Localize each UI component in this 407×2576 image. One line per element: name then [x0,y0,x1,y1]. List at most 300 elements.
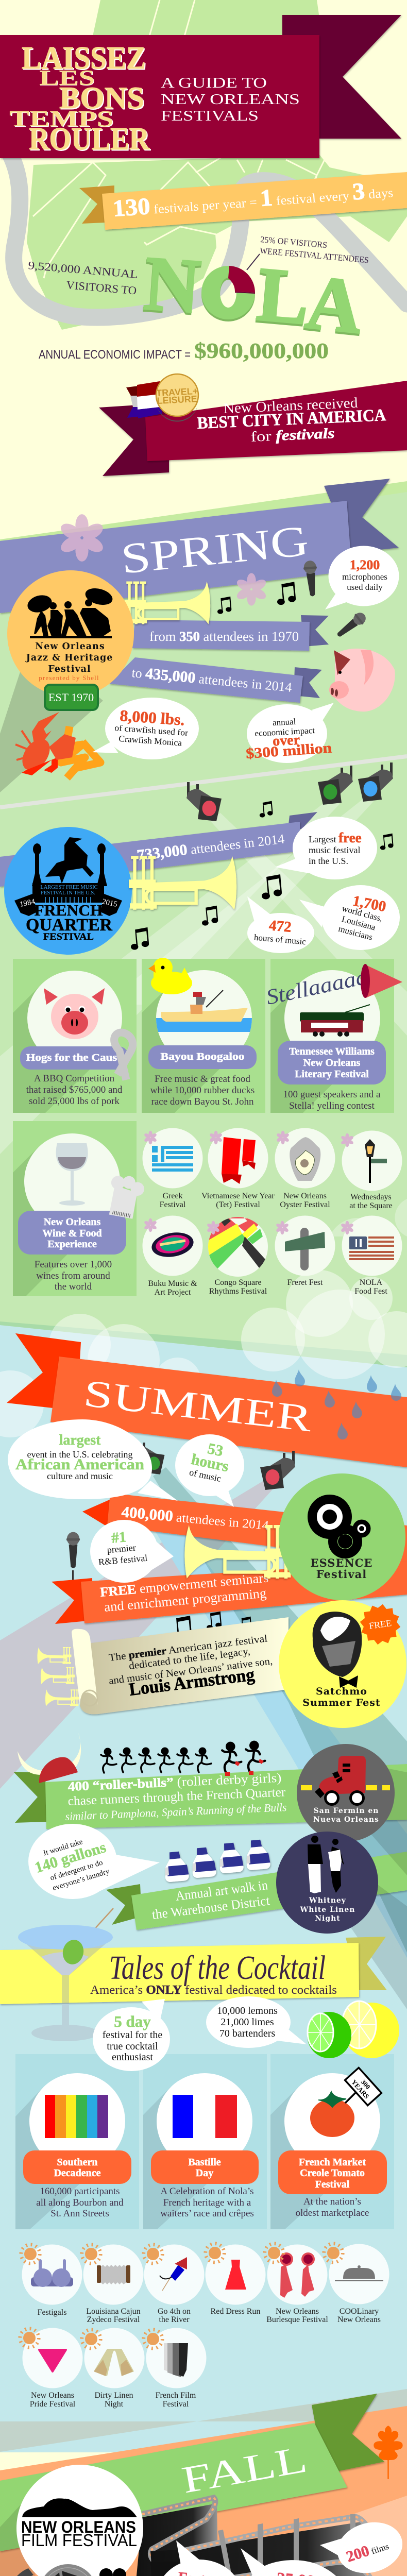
heading: Tales of the Cocktail: Tales of the Cocktail [109,1949,326,1987]
festival: Greek Festival: Greek [162,1192,183,1200]
festival: Congo Square [206,1216,268,1296]
icon: streetcar [300,1005,370,1037]
Whitney White Linen Night badge: Whitney [309,1896,346,1905]
bubble: 472 hours [247,896,314,953]
annual economic impact [39,340,329,363]
bubble: largest free music festival [275,817,377,879]
panel: Wine and Food Experience: the world [55,1281,92,1292]
bubble: 200 films: 200 films [344,2536,391,2566]
bubble: largest event: African American [15,1456,144,1473]
bubble: 5 day festival: true cocktail [107,2041,158,2052]
panel: Hogs for the Cause [13,959,137,1113]
icon: movie camera [99,2568,129,2576]
icon: Travel + Leisure medal: LEISURE [157,394,197,406]
panel: Bastille Day: A Celebration of Nola’s [161,2186,253,2197]
bubble: economic impact over $300 million: annual [273,717,296,727]
stage light beams: summer [0,1467,407,1958]
ribbon: 400,000 attendees [82,1493,407,1564]
French Quarter Festival badge: 2015 [101,897,118,909]
title: Laissez les bons temps rouler: ROULER [29,122,150,157]
bubble: 8,000 lbs of crawfish: Crawfish Monica [118,734,182,748]
icon: notes [172,1612,252,1640]
camera light beam [127,2496,407,2576]
icon: trumpet spring [125,581,210,624]
bubble: 472 hours: 472 [268,917,292,936]
icon: spotlights [134,1441,295,1490]
festival: Dirty Linen: Dirty Linen [94,2391,133,2400]
icon: Louis Armstrong portrait [313,1612,362,1688]
panel: Wine and Food Experience [13,1121,147,1296]
icon: flower [58,514,106,562]
title: Laissez les bons temps rouler: LAISSEZ [22,41,146,76]
bubble: 1,200 microphones [325,546,399,609]
icon: chef hat [101,1171,147,1223]
icon: free burst [358,1602,402,1647]
festival: Oyster: New Orleans [283,1192,327,1200]
festival: Red Dress Run [205,2244,266,2316]
bubble: lemons, limes, bartenders: 10,000 lemons [217,2005,278,2016]
icon: free burst: FREE [368,1618,392,1631]
Tales banner: America’s ONLY festival dedicated to cocktails [90,1984,337,1997]
festival: NOLA Food Fest: Food Fest [354,1287,387,1296]
panel: Wine and Food Experience: wines from around [36,1270,110,1281]
San Fermin badge [297,1744,407,1875]
ribbon: from 350 attendees: from 350 attendees in 1970 [149,629,299,644]
icon: water and canoe [156,990,253,1032]
background: fall [0,2389,407,2576]
festival: Buku: Art Project [155,1288,191,1297]
panel: Bastille Day: Bastille [188,2157,221,2168]
Satchmo Summer Fest badge [279,1600,406,1728]
icon: megaphone [361,964,402,998]
ribbon: roller-bulls: 400 “roller-bulls” (roller derby girls) [67,1771,282,1794]
NOLA big letters with pie chart: L [254,251,313,341]
title: Laissez les bons temps rouler: BONS [60,82,145,116]
callout: 25% of visitors [247,234,369,270]
festival: Oyster [275,1128,335,1209]
festival: COOLinary [324,2244,389,2324]
festival: Go 4th: Go 4th on [158,2307,191,2316]
festival: NOLA Food Fest [341,1216,402,1296]
best city ribbon [99,381,407,476]
panel: Creole Tomato Festival: Creole Tomato [300,2167,365,2179]
festival: Pride [20,2328,82,2409]
Essence Festival badge: ESSENCE [311,1556,372,1569]
festival: Go 4th: the River [159,2315,190,2324]
New Orleans Film Festival badge: NEW ORLEANS [21,2518,136,2536]
icon: trumpet summer [184,1525,292,1579]
panel: Wine and Food Experience: Features over 1,000 [35,1259,112,1270]
bubble: 8,000 lbs of crawfish: of crawfish used for [114,723,189,738]
bubble: 5 day festival: 5 day [114,2012,151,2030]
Whitney White Linen Night badge: Night [315,1914,341,1923]
jazz fest badge: Festival [48,664,91,674]
bubble: largest event [8,1419,178,1501]
panel: Bayou Boogaloo: Bayou Boogaloo [161,1051,244,1062]
long shadow of jazz fest badge [0,639,103,792]
bubble: economic impact over $300 million: over [272,732,300,749]
panel: Hogs for the Cause: Hogs for the Cause [26,1052,123,1063]
New Orleans Film Festival badge: FILM FESTIVAL [21,2531,137,2550]
logo: alligator [22,2498,137,2517]
festival: Oyster: Oyster Festival [280,1200,330,1209]
bubble: 1,700 musicians: Louisiana [341,914,377,933]
stage wire [0,756,407,807]
festival: Tet: (Tet) Festival [216,1200,260,1209]
summer banner [50,1357,407,1467]
best city ribbon: for festivals [250,426,335,445]
festival: NOLA Food Fest: NOLA [360,1278,383,1287]
ribbon: free empowerment seminars: and enrichment programming [104,1586,267,1615]
header banner [0,35,319,158]
fall banner tail [312,2394,384,2474]
bubble: 53 hours: 53 [206,1440,225,1460]
panel: Tennessee Williams festival: Literary Festival [295,1069,369,1080]
bubble: lemons, limes, bartenders [206,1996,307,2048]
festival: French Film: French Film [156,2391,196,2400]
Satchmo Summer Fest badge: Satchmo [316,1686,367,1697]
scroll: Satchmo description: and music of New Orleans’ native son, [108,1655,273,1687]
bubble: 5 day festival: enthusiast [112,2052,153,2063]
title: Laissez les bons temps rouler: LES [39,66,95,90]
festival: Dirty Linen: Night [105,2400,124,2409]
scroll: Satchmo description: The premier American jazz festival [108,1633,268,1664]
title: Laissez les bons temps rouler: ROULER [30,123,151,158]
festival: Wednesdays at the Square: at the Square [349,1201,393,1210]
icon: detergent bottles [163,1839,270,1883]
map of New Orleans [10,0,407,330]
ribbon: to 435,000 attendees: to 435,000 attendees in 2014 [131,664,293,696]
festival: Dirty Linen [82,2328,144,2409]
ribbon: art walk: Annual art walk in [175,1877,268,1904]
title: Laissez les bons temps rouler: BONS [59,81,144,115]
logo: Essence rings [312,1499,368,1554]
icon: tomato with sign: YEARS [350,2078,371,2100]
festival: Burlesque [265,2244,328,2324]
panel: Bastille Day: French heritage with a [163,2197,251,2208]
bubble: #1 R&B festival: premier [107,1543,136,1555]
bubble: largest free music festival: music festival [309,845,360,855]
bubble: 1,700 musicians: world class, [341,903,384,924]
icon: piggy bank [329,649,395,711]
festival: Cajun Zydeco: Zydeco Festival [87,2315,140,2324]
heading: spring: SPRING [119,517,311,583]
San Fermin badge: Nueva Orleans [313,1816,379,1824]
bubble: 1,200 microphones: 1,200 [350,557,380,572]
text: 9,520,000 annual visitors: VISITORS TO [66,278,137,297]
festival: COOLinary: COOLinary [340,2307,379,2316]
festival: Festigals: Festigals [38,2308,66,2317]
panel: Tennessee Williams festival: New Orleans [303,1057,360,1069]
ribbon: 733,000 attendees [0,812,317,887]
subtitle: a guide to New Orleans festivals [161,75,300,124]
bubble: largest event: event in the U.S. celebrating [27,1449,132,1460]
best city ribbon: BEST CITY IN AMERICA [197,406,386,433]
jazz fest badge: New Orleans [35,641,105,652]
jazz fest badge: Jazz & Heritage [25,653,113,663]
festival: Pride: Pride Festival [30,2400,76,2409]
panel: Creole Tomato Festival: Festival [315,2179,350,2190]
icon: running figures [101,1741,265,1776]
festival: Buku: Buku Music & [148,1279,197,1288]
panel: Southern Decadence: St. Ann Streets [50,2208,109,2219]
ribbon: free empowerment seminars: FREE empowerment seminars [99,1570,269,1600]
icon: microphones [303,560,368,641]
bubble: 472 hours: hours of music [253,933,307,946]
bubble: economic impact over $300 million [245,703,334,763]
panel: Creole Tomato Festival: At the nation’s [303,2196,361,2207]
bubble: economic impact over $300 million: economic impact [255,725,315,738]
ribbon: from 350 attendees [132,615,329,651]
spring festival list [142,1128,402,1297]
callout: 25% of visitors: 25% OF VISITORS [260,234,328,250]
bubble: lemons, limes, bartenders: 70 bartenders [219,2028,275,2039]
jazz fest badge: presented by Shell [39,674,99,682]
icon: rainbow flag [45,2095,108,2138]
festival: Buku [142,1216,203,1297]
icon: awareness ribbon [114,1032,133,1080]
ribbon: 733,000 attendees: 733,000 attendees in 2014 [136,830,285,864]
bubble: 25,000 attendees [241,2548,347,2576]
icon: raindrops [272,1369,401,1439]
title: Laissez les bons temps rouler: TEMPS [10,107,114,132]
festival: Tet: Vietnamese New Year [201,1192,275,1200]
panel: Bayou Boogaloo: race down Bayou St. John [151,1096,254,1107]
bubble: #1 R&B festival: #1 [111,1529,127,1547]
annual economic impact: $960,000,000 [194,340,329,363]
scroll: Satchmo description: dedicated to the life, legacy, [128,1646,251,1672]
panel: Bayou Boogaloo: Free music & great food [155,1074,250,1084]
bubble: 140 gallons of detergent: 140 gallons [33,1839,108,1876]
bubble: 5 day festival: festival for the [103,2029,162,2041]
icon: tomato with sign: 300 [360,2078,372,2091]
ribbon: free empowerment seminars [52,1562,407,1624]
Satchmo Summer Fest badge: Summer Fest [302,1697,381,1708]
panel: Tennessee Williams festival: Stella! yelling contest [289,1100,375,1111]
festival: Congo Square: Rhythms Festival [209,1287,267,1296]
icon: rubber duck [148,958,192,994]
icon: film strip [135,2498,374,2576]
icon: spotlights [186,762,393,821]
dancers silhouette [26,586,114,638]
bubble: largest event: largest [59,1432,101,1448]
bubble: lemons, limes, bartenders: 21,000 limes [221,2016,274,2028]
stage light beams [0,796,407,1154]
heading: summer: SUMMER [81,1372,314,1440]
icon: notes [131,801,394,950]
ribbon: 130 festivals per year: 130 festivals per year = 1 festival every 3 days [112,176,394,222]
icon: microphone [66,1532,80,1582]
French Quarter Festival badge [4,827,132,955]
Whitney White Linen Night badge: White Linen [300,1906,355,1914]
panel: Bastille Day: waiters’ race and crêpes [160,2208,254,2219]
French Quarter Festival badge: FRENCH [34,901,103,919]
festival: Pride: New Orleans [31,2391,74,2400]
fall banner [0,2423,347,2551]
icon: crawfish and pasta [15,712,100,778]
French Quarter Festival badge: LARGEST FREE MUSIC [40,885,98,890]
clouds [0,1199,407,1437]
panel: Hogs for the Cause: A BBQ Competition [34,1073,115,1084]
NOLA big letters with pie chart: N [141,242,202,331]
heading: fall: FALL [179,2438,310,2502]
ribbon: roller-bulls: chase runners through the French Quarter [67,1785,286,1808]
jazz fest badge [7,570,134,710]
bubble: 140 gallons of detergent: of detergent to do [49,1858,104,1883]
title: Laissez les bons temps rouler [9,41,151,158]
NOLA big letters with pie chart: L [253,253,312,343]
panel: Bayou Boogaloo [142,958,265,1113]
ribbon: roller-bulls [13,1764,407,1829]
French Quarter Festival badge: FESTIVAL IN THE U.S. [41,890,95,896]
bubble: 200 films [320,2515,407,2576]
bubble: fastest growing [157,2540,242,2576]
ribbon: art walk: the Warehouse District [151,1893,271,1922]
Tales banner [0,1908,387,2041]
panel: Creole Tomato Festival: French Market [299,2157,366,2168]
icon: flower small [235,573,268,606]
festival: Greek Festival: Festival [160,1200,186,1209]
Essence Festival badge [279,1473,405,1600]
spring banner [0,501,352,613]
bubble: 1,200 microphones: used daily [347,582,383,592]
French Quarter Festival badge: FESTIVAL [43,931,94,942]
bubble: 140 gallons of detergent: everyone’s laundry [52,1867,111,1892]
bubble: 53 hours [175,1434,244,1507]
text: 9,520,000 annual visitors: 9,520,000 ANNUAL [28,259,139,281]
panel: Creole Tomato Festival [270,2054,394,2229]
icon: pig [44,988,105,1039]
festival: Freret Fest: Freret Fest [287,1278,323,1287]
panel: Wine and Food Experience: New Orleans [44,1216,100,1228]
panel: Bastille Day [143,2054,267,2229]
icon: couple silhouette [308,1836,344,1893]
Essence Festival badge: Festival [316,1568,367,1581]
icon: wine glass [56,1143,88,1206]
jazz fest badge: EST 1970 [48,691,94,704]
best city ribbon: New Orleans received [223,395,358,417]
icon: viking helmet [18,1733,81,1783]
icon: notes [217,582,296,614]
icon: French flag [173,2095,237,2138]
panel: Southern Decadence: Southern [57,2157,97,2168]
festival: COOLinary: New Orleans [337,2315,381,2324]
icon: strap [5,2568,36,2576]
panel: Bastille Day: Day [196,2167,213,2179]
festival: Wednesdays at the Square [341,1130,402,1210]
panel: Southern Decadence: all along Bourbon and [36,2197,124,2208]
bubble: economic impact over $300 million: $300 million [245,740,333,762]
bubble: 1,700 musicians: musicians [337,924,374,942]
festival: Burlesque: Burlesque Festival [266,2315,328,2324]
bubble: 1,700 musicians [299,885,400,950]
festival: Festigals [21,2244,82,2317]
ribbon: art walk [106,1852,407,1930]
bubble: 140 gallons of detergent: It would take [42,1838,84,1858]
festival: French Film [144,2328,206,2409]
festival: Congo Square: Congo Square [214,1278,262,1287]
panel: Tennessee Williams festival: 100 guest speakers and a [283,1089,381,1100]
panel: Wine and Food Experience: Experience [47,1239,97,1250]
text: 9,520,000 annual visitors [28,259,139,297]
festival: Wednesdays at the Square: Wednesdays [350,1193,392,1201]
annual economic impact: ANNUAL ECONOMIC IMPACT = [39,348,191,362]
panel: Hogs for the Cause: that raised $765,000 and [26,1084,123,1095]
bubble: largest free music festival: in the U.S. [309,856,348,866]
NOLA big letters with pie chart: N [142,240,203,329]
spring banner tail [324,479,399,553]
header ribbon tail [282,15,401,139]
festival: Tet [201,1128,275,1209]
panel: Wine and Food Experience: Wine & Food [42,1228,102,1239]
summer festival list [20,2244,389,2409]
festival: Cajun Zydeco: Louisiana Cajun [86,2307,141,2316]
summer banner tail [7,1333,81,1408]
icon: martini [18,1908,113,2041]
panel: Southern Decadence [15,2054,139,2229]
NOLA big letters with pie chart: A [302,261,366,352]
bubble: largest event: culture and music [47,1471,113,1481]
icon: roller skate [315,1756,366,1806]
festival: Red Dress Run: Red Dress Run [211,2307,260,2316]
background: spring [0,481,407,1391]
ribbon: 400,000 attendees: 400,000 attendees in 2014 [121,1503,270,1533]
subtitle: a guide to New Orleans festivals: NEW ORLEANS [161,91,300,108]
bubble: 140 gallons of detergent [28,1824,160,1899]
panel: Creole Tomato Festival: oldest marketplace [296,2208,369,2218]
bubble: 1,200 microphones: microphones [342,572,387,582]
subtitle: a guide to New Orleans festivals: FESTIVALS [161,108,259,124]
icon: trumpet french quarter [129,856,236,910]
icon: lemon and lime [307,2001,399,2058]
bubble: 5 day festival [93,1999,170,2071]
panel: Hogs for the Cause: sold 25,000 lbs of pork [29,1096,120,1107]
panel: Southern Decadence: Decadence [54,2167,101,2179]
icon: Travel + Leisure medal: TRAVEL+ [156,386,198,398]
icon: film reel [39,2564,97,2576]
festival: Cajun Zydeco [82,2244,143,2324]
title: Laissez les bons temps rouler: TEMPS [9,106,113,131]
French Quarter Festival badge: 1984 [19,897,36,909]
Whitney White Linen Night badge [276,1832,407,2009]
icon: Stella scrawl: Stellaaaaa [264,965,370,1010]
bubble: largest free music festival: Largest free [309,830,362,845]
ribbon: roller-bulls: similar to Pamplona, Spain’s Running of the Bulls [65,1801,287,1823]
background: summer [0,1321,407,2452]
bubble: 1,700 musicians: 1,700 [351,892,387,915]
bubble: #1 R&B festival [90,1520,174,1583]
panel: Tennessee Williams festival: Tennessee Williams [289,1046,375,1057]
title: Laissez les bons temps rouler: LAISSEZ [23,42,147,77]
bubble: 53 hours: of music [189,1467,222,1484]
callout: 25% of visitors: WERE FESTIVAL ATTENDEES [260,246,369,265]
San Fermin badge: San Fermin en [314,1807,379,1815]
panel: Southern Decadence: 160,000 participants [40,2186,120,2197]
ribbon: to 435,000 attendees [109,657,322,703]
NOLA big letters with pie chart [141,240,367,352]
icon: tomato with sign [310,2067,381,2137]
scroll: Satchmo description [72,1617,289,1714]
bubble: 8,000 lbs of crawfish [92,698,199,759]
ribbon: 130 festivals per year [79,172,407,230]
subtitle: a guide to New Orleans festivals: A GUIDE TO [161,75,267,91]
festival: Burlesque: New Orleans [276,2307,319,2316]
panel: Bayou Boogaloo: while 10,000 rubber ducks [150,1085,255,1096]
icon: mini trumpets [37,1647,79,1706]
NOLA big letters with pie chart: A [302,259,367,350]
festival: French Film: Festival [163,2400,189,2409]
French Quarter Festival badge: QUARTER [26,916,112,935]
